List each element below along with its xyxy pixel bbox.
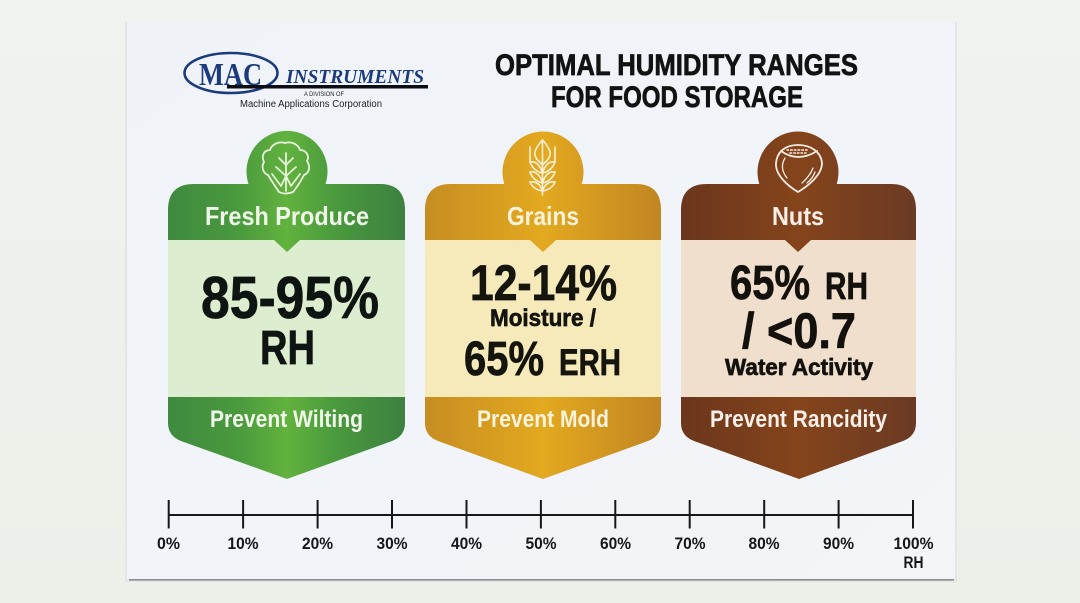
panel: nuts — [681, 132, 916, 479]
humidity scale axis: 100% — [894, 535, 934, 553]
header: fresh produce: Fresh Produce — [205, 201, 369, 231]
humidity scale axis: 80% — [748, 535, 780, 553]
stat: 12-14% moisture / 65% ERH: 65% — [464, 333, 544, 386]
panel body: grains — [425, 240, 661, 397]
icon: hazelnut — [776, 145, 822, 192]
footer: prevent rancidity — [681, 397, 916, 479]
title — [495, 49, 858, 114]
humidity scale axis: 10% — [228, 535, 259, 553]
panel body: fresh produce — [168, 240, 405, 397]
humidity scale axis — [157, 500, 934, 572]
footer: prevent rancidity: Prevent Rancidity — [710, 406, 887, 433]
humidity scale axis: 30% — [376, 535, 408, 553]
logo: MAC Instruments: MAC — [199, 56, 262, 92]
panel: fresh produce — [168, 131, 405, 479]
header: fresh produce — [168, 131, 405, 252]
header: nuts: Nuts — [772, 201, 824, 231]
stat: 12-14% moisture / 65% ERH: 12-14% — [470, 255, 617, 311]
logo: MAC Instruments: INSTRUMENTS — [285, 66, 424, 88]
humidity scale axis: 20% — [302, 535, 333, 553]
footer: prevent mold: Prevent Mold — [477, 406, 609, 433]
header: grains — [425, 132, 661, 252]
footer: prevent wilting: Prevent Wilting — [210, 406, 363, 433]
title: FOR FOOD STORAGE — [551, 81, 803, 114]
stat: 65% RH / <0.7 water activity: 65% — [730, 257, 810, 310]
header: nuts — [681, 132, 916, 252]
humidity scale axis: 0% — [157, 535, 180, 553]
humidity scale axis: 70% — [674, 535, 706, 553]
header: grains: Grains — [507, 201, 579, 231]
logo: MAC Instruments — [184, 53, 428, 110]
poster sheet — [125, 22, 957, 582]
stat: 85-95% RH — [201, 265, 379, 375]
stat: 65% RH / <0.7 water activity — [725, 257, 873, 380]
humidity scale axis: 40% — [451, 535, 482, 553]
stat: 65% RH / <0.7 water activity: Water Activity — [725, 354, 873, 380]
logo: MAC Instruments: A DIVISION OF — [304, 92, 344, 98]
footer: prevent mold — [425, 397, 661, 479]
icon: wheat — [530, 140, 555, 195]
logo: MAC Instruments: Machine Applications Corporation — [240, 99, 382, 110]
stat: 65% RH / <0.7 water activity: RH — [825, 266, 868, 308]
stat: 85-95% RH: 85-95% — [201, 265, 379, 331]
panel: grains — [425, 132, 661, 479]
stat: 12-14% moisture / 65% ERH: Moisture / — [490, 305, 596, 332]
footer: prevent wilting — [168, 397, 405, 479]
stat: 65% RH / <0.7 water activity: / <0.7 — [742, 303, 856, 359]
humidity scale axis: 60% — [600, 535, 631, 553]
stat: 12-14% moisture / 65% ERH: ERH — [559, 342, 621, 383]
panel body: nuts — [681, 240, 916, 397]
humidity scale axis: RH — [904, 554, 924, 572]
stat: 12-14% moisture / 65% ERH — [464, 255, 621, 386]
humidity scale axis: 90% — [823, 535, 854, 553]
icon: lettuce — [263, 142, 309, 194]
title: OPTIMAL HUMIDITY RANGES — [495, 49, 858, 82]
stat: 85-95% RH: RH — [260, 322, 315, 375]
humidity scale axis: 50% — [526, 535, 557, 553]
